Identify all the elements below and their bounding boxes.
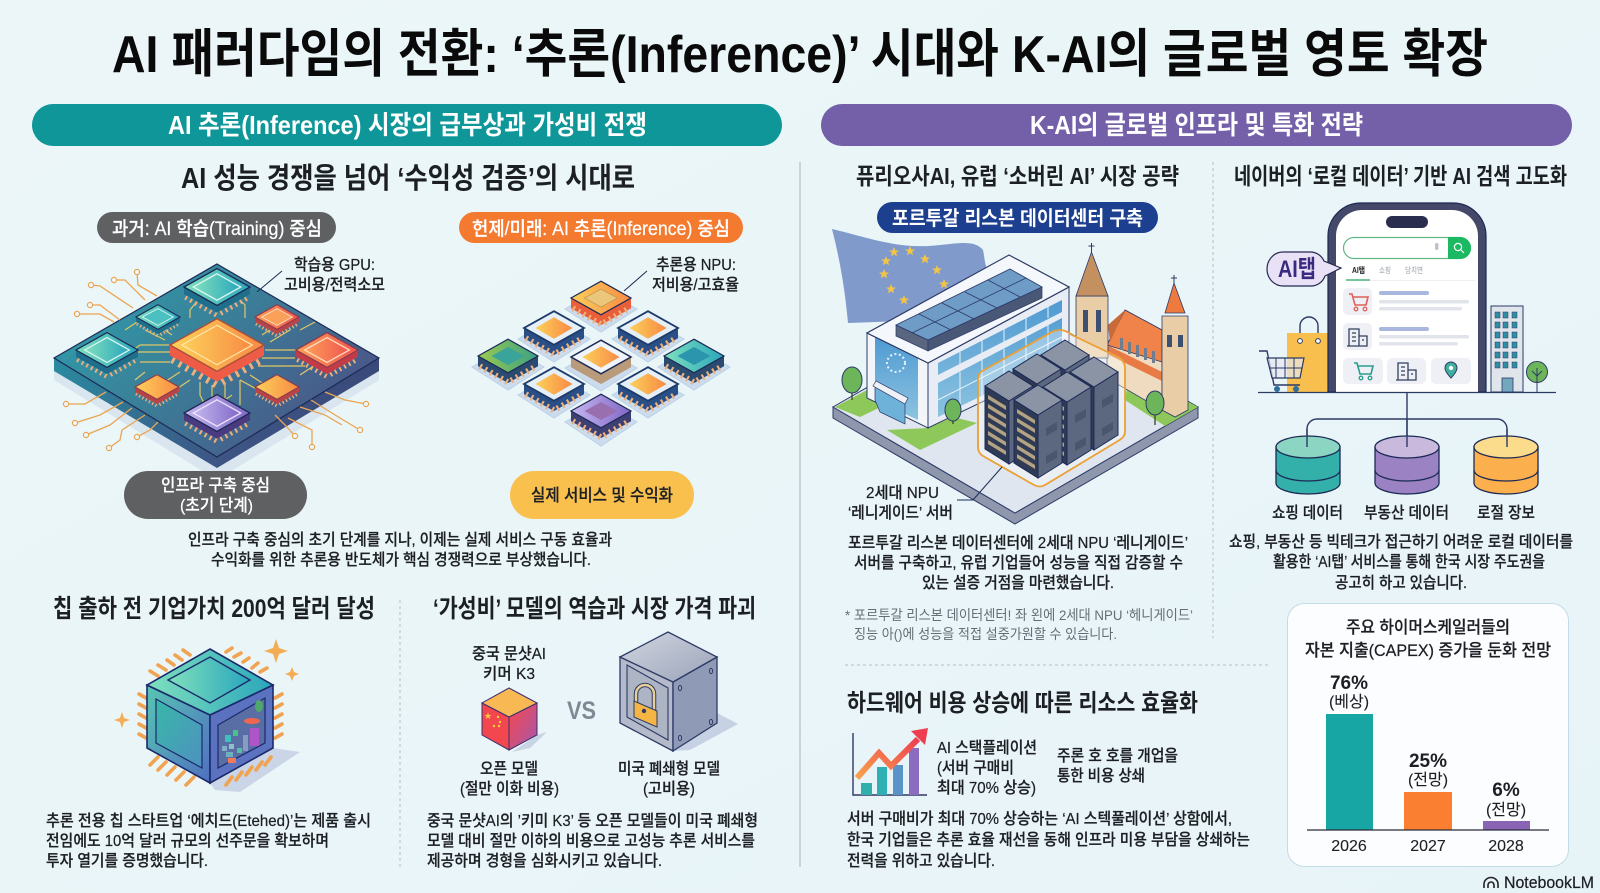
shortcut buttons — [1343, 358, 1471, 384]
panel: hardware cost — [847, 690, 1250, 870]
icon: rising cost chart — [853, 728, 928, 795]
pill: Lisbon data center — [877, 202, 1158, 233]
text: Lisbon body: 서버를 구축하고, 유럽 기업들어 성능을 직접 감증할 수 — [854, 554, 1183, 572]
panel: Etched — [46, 595, 375, 870]
church — [1076, 243, 1188, 417]
chips on board — [76, 269, 358, 440]
label: Renegade server: ‘레니게이드’ 서버 — [848, 504, 953, 522]
label: inference NPU: 추론용 NPU: — [656, 256, 736, 274]
text: VS: VS — [567, 697, 596, 725]
label: Kimi K3: 키머 K3 — [483, 665, 535, 683]
text: Etched body: 전임에도 10억 달러 규모의 선주문을 확보하며 — [46, 832, 329, 850]
text: hardware body — [847, 810, 1250, 870]
text: Lisbon body — [848, 534, 1188, 592]
text: Naver body: 쇼핑, 부동산 등 빅테크가 접근하기 어려운 로컬 데이터를 — [1229, 533, 1573, 551]
chart title: 자본 지출(CAPEX) 증가을 둔화 전망 — [1305, 641, 1551, 660]
chart title — [1305, 618, 1551, 660]
labels: databases: 로절 장보 — [1477, 504, 1535, 522]
value labels: (전망) — [1408, 771, 1448, 789]
traces — [125, 296, 315, 405]
panel: training vs inference — [54, 162, 743, 569]
banner: right section: K-AI의 글로벌 인프라 및 특화 전략 — [1030, 110, 1363, 140]
heading: price disruption: ‘가성비’ 모델의 역습과 시장 가격 파괴 — [433, 595, 756, 623]
phone tabs: 당치면 — [1405, 265, 1423, 275]
text: Naver body: 활용한 ‘AI탭’ 서비스를 통해 한국 시장 주도권을 — [1273, 553, 1545, 571]
text: Lisbon body: 포르투갈 리스본 데이터센터에 2세대 NPU ‘레니게이드’ — [848, 534, 1188, 552]
text: models body — [427, 812, 758, 870]
illustration: inference NPU grid — [472, 281, 730, 446]
label: training GPU: 학습용 GPU: — [294, 256, 375, 274]
tag: real service: 실제 서비스 및 수익화 — [531, 486, 673, 505]
text: models body: 중국 문샷AI의 ’키미 K3’ 등 오픈 모델들이 미국 폐쇄형 — [427, 812, 758, 830]
illustration: data center scene — [832, 229, 1198, 524]
value labels — [1329, 673, 1526, 819]
label: closed model — [618, 760, 720, 798]
ground plate — [833, 302, 1198, 524]
text: models body: 모델 대비 절만 이하의 비용으로 고성능 추론 서비스를 — [427, 832, 755, 850]
heading: Etched valuation: 칩 출하 전 기업가치 200억 달러 달성 — [53, 595, 375, 623]
year labels — [1331, 838, 1524, 855]
text: footnote: 징능 아()에 성능을 적접 설중가원할 수 있습니다. — [854, 626, 1117, 642]
pill: past training: 과거: AI 학습(Training) 중심 — [112, 218, 322, 240]
labels: databases: 쇼핑 데이터 — [1272, 504, 1343, 522]
heading: sovereign AI: 퓨리오사AI, 유럽 ‘소버린 AI’ 시장 공략 — [856, 163, 1179, 189]
phone body — [1328, 203, 1486, 392]
illustration: phone with AI tab — [1258, 203, 1556, 392]
trees — [842, 367, 1164, 425]
text: hardware body: 전력을 위하고 있습니다. — [847, 852, 995, 870]
result row: real estate — [1343, 323, 1469, 350]
pill: past training — [97, 212, 336, 243]
tag: infrastructure stage: (초기 단계) — [180, 496, 253, 515]
tag: real service — [510, 471, 694, 519]
panel: FuriosaAI Europe — [832, 163, 1198, 642]
label: AI stackflation: (서버 구매비 — [937, 759, 1014, 777]
text: shift summary — [188, 531, 612, 569]
phone tabs — [1352, 265, 1423, 275]
value labels: 25% — [1409, 751, 1447, 772]
year labels: 2028 — [1488, 838, 1524, 855]
label: AI stackflation — [937, 739, 1037, 797]
icon: shopping database — [1276, 429, 1340, 494]
label: training GPU — [257, 256, 385, 294]
text: hardware body: 서버 구매비가 최대 70% 상승하는 ‘AI 스텍풀레이션’ 상함에서, — [847, 810, 1232, 828]
label: closed model: 미국 폐쇄형 모델 — [618, 760, 720, 778]
city building and tree — [1491, 306, 1548, 392]
icon: locked safe — [620, 632, 738, 751]
value labels: (베상) — [1329, 693, 1369, 711]
heading: profitability era: AI 성능 경쟁을 넘어 ‘수익성 검증’의 시대로 — [181, 162, 635, 195]
value labels: 6% — [1492, 780, 1520, 801]
data connector — [1307, 392, 1507, 447]
icon: real estate database — [1375, 419, 1439, 494]
server highlight — [978, 330, 1125, 486]
banner: right section — [821, 104, 1572, 146]
text: footnote — [845, 607, 1193, 642]
label: open model — [460, 760, 559, 798]
pill: Lisbon data center: 포르투갈 리스본 데이터센터 구축 — [892, 207, 1143, 230]
panel: cost-effective models — [427, 595, 758, 870]
phone tabs: AI탭 — [1352, 265, 1365, 275]
illustration: glowing chip cube — [114, 639, 300, 792]
label: cost offset: 통한 비용 상쇄 — [1057, 767, 1145, 785]
labels: databases: 부동산 데이터 — [1364, 504, 1449, 522]
tag: infrastructure stage — [124, 471, 307, 519]
icon: local info database — [1474, 429, 1538, 494]
labels: databases — [1272, 504, 1535, 522]
card: CAPEX chart — [1288, 604, 1568, 866]
text: Etched body: 추론 전용 칩 스타트업 ‘에치드(Etehed)’는 제품 출시 — [46, 812, 371, 830]
text: Lisbon body: 있는 설증 거점을 마련했습니다. — [922, 574, 1114, 592]
panel: Naver local data — [1229, 163, 1573, 592]
label: inference NPU: 저비용/고효율 — [652, 276, 739, 294]
result row: shopping — [1343, 288, 1469, 315]
label: cost offset: 주론 호 호를 개업을 — [1057, 747, 1178, 765]
label: cost offset — [1057, 747, 1178, 785]
text: Naver body — [1229, 533, 1573, 592]
text: Etched body — [46, 812, 371, 870]
banner: left section: AI 추론(Inference) 시장의 급부상과 가성비 전쟁 — [168, 110, 647, 140]
tag: infrastructure stage: 인프라 구축 중심 — [161, 476, 270, 495]
illustration: training GPU board — [54, 264, 379, 480]
outer leads — [63, 269, 369, 451]
server racks — [985, 340, 1118, 478]
office building — [867, 255, 1069, 428]
heading: resource efficiency: 하드웨어 비용 상승에 따른 리소스 효율화 — [847, 690, 1198, 717]
label: Renegade server: 2세대 NPU — [866, 484, 939, 502]
banner: left section — [32, 104, 782, 146]
text: shift summary: 인프라 구축 중심의 초기 단계를 지나, 이제는 실제 서비스 구동 효율과 — [188, 531, 612, 549]
label: open model: (절만 이화 비용) — [460, 780, 559, 798]
text: Etched body: 투자 열기를 증명했습니다. — [46, 852, 208, 870]
EU flag — [832, 229, 1000, 323]
icon: open model cube — [482, 688, 547, 752]
pill: present inference: 헌제/미래: AI 추론(Inference) 중심 — [472, 218, 730, 240]
bar chart — [1307, 673, 1549, 855]
text: models body: 제공하며 경형을 심화시키고 있습니다. — [427, 852, 662, 870]
text: footnote: * 포르투갈 리스본 데이터센터! 좌 왼에 2세대 NPU ‘헤니게이드’ — [845, 607, 1193, 623]
phone tabs: 쇼핑 — [1379, 265, 1391, 275]
value labels: (전망) — [1486, 801, 1526, 819]
label: Kimi K3: 중국 문샷AI — [472, 645, 546, 663]
label: AI stackflation: AI 스택플레이션 — [937, 739, 1037, 757]
pill: present inference — [459, 212, 743, 243]
shopping bag and cart — [1259, 317, 1330, 392]
year labels: 2026 — [1331, 838, 1367, 855]
text: hardware body: 한국 기업들은 추론 효율 재선을 동해 인프라 미용 부담을 상쇄하는 — [847, 831, 1250, 849]
logo: NotebookLM: NotebookLM — [1504, 874, 1594, 892]
label: Renegade server — [848, 467, 1002, 522]
label: inference NPU — [624, 256, 739, 294]
label: closed model: (고비용) — [643, 780, 695, 798]
year labels: 2027 — [1410, 838, 1446, 855]
chart title: 주요 하이머스케일러들의 — [1346, 618, 1510, 637]
callout: AI tab — [1267, 252, 1341, 286]
label: AI stackflation: 최대 70% 상승) — [937, 779, 1036, 797]
label: Kimi K3 — [472, 645, 546, 683]
callout: AI tab: AI탭 — [1278, 256, 1316, 283]
label: open model: 오픈 모델 — [480, 760, 538, 778]
label: training GPU: 고비용/전력소모 — [284, 276, 385, 294]
text: shift summary: 수익화를 위한 추론용 반도체가 핵심 경쟁력으로 부상했습니다. — [211, 551, 591, 569]
text: Naver body: 공고히 하고 있습니다. — [1335, 574, 1467, 592]
value labels: 76% — [1330, 673, 1368, 694]
